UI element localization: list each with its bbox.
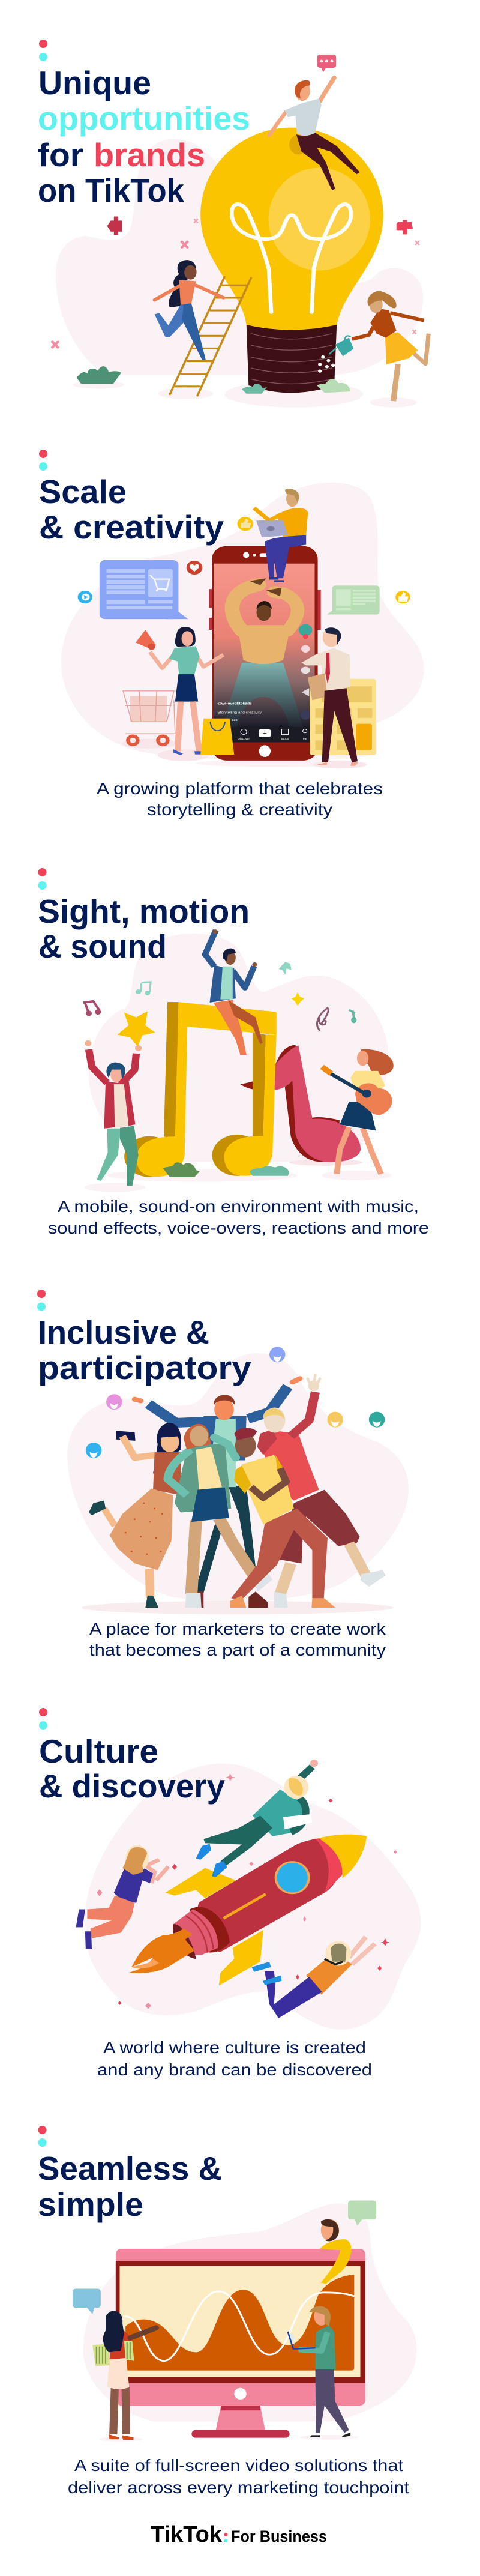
icon: phone: Me (303, 737, 307, 741)
figure: man flying above (196, 1760, 318, 1877)
icon: chat bubbles (73, 2200, 376, 2314)
title: for (38, 136, 83, 173)
section marker dots (39, 1708, 47, 1730)
figure: man sitting on bulb (269, 77, 359, 190)
illustration: lightbulb with people (52, 55, 428, 408)
figure: woman on ladder (155, 260, 223, 360)
heading: & discovery (39, 1767, 225, 1805)
icon: phone: + (263, 730, 267, 737)
caption: deliver across every marketing touchpoint (68, 2478, 409, 2497)
title: Unique (38, 64, 151, 101)
icon: phone: Storytelling and creativity (217, 711, 262, 715)
icon: bushes (77, 366, 350, 394)
panel: sight, motion and sound (38, 868, 429, 1237)
heading: participatory (38, 1349, 251, 1386)
caption: A place for marketers to create work (89, 1620, 386, 1638)
caption (68, 2456, 409, 2497)
panel: intro (38, 40, 428, 408)
heading (39, 1733, 225, 1805)
heading: & creativity (39, 508, 224, 546)
caption (89, 1620, 386, 1659)
heading: Culture (39, 1733, 158, 1770)
icon: calculator (310, 679, 376, 755)
heading: Seamless & (38, 2150, 222, 2187)
caption: A growing platform that celebrates (97, 779, 383, 798)
figure: man on phone (302, 627, 358, 766)
figure: woman with polka skirt and phone (89, 1423, 181, 1608)
panel: culture and discovery (39, 1708, 421, 2079)
caption (97, 2038, 372, 2079)
icon: puzzle pieces and crosses (52, 216, 419, 348)
icon: monitor (116, 2249, 365, 2438)
illustration: monitor with people (73, 2200, 417, 2442)
logo: TikTok For Business (151, 2522, 327, 2547)
caption: and any brand can be discovered (97, 2060, 372, 2079)
caption (97, 779, 383, 819)
figure: woman in green jacket (168, 1424, 272, 1608)
figure: man with laptop (254, 489, 308, 582)
icon: reaction bubbles (78, 517, 410, 603)
figure: person sitting on note (205, 929, 263, 1055)
heading (39, 473, 224, 546)
icon: phone: Inbox (281, 737, 289, 741)
figure: man in yellow tee and cap (230, 1428, 335, 1608)
section marker dots (39, 450, 47, 471)
icon: pink note (241, 1045, 361, 1162)
caption: A suite of full-screen video solutions that (74, 2456, 403, 2475)
caption: that becomes a part of a community (89, 1641, 386, 1659)
figure: bearded man leaning over (320, 2219, 352, 2284)
icon: lightbulb (200, 128, 383, 393)
panel: inclusive and participatory (37, 1290, 409, 1659)
heading (38, 893, 250, 965)
section marker dots (39, 40, 47, 61)
figure: woman at left (92, 2311, 156, 2440)
heading: Sight, motion (38, 893, 250, 930)
section marker dots (37, 1290, 46, 1311)
caption: sound effects, voice-overs, reactions and more (48, 1219, 429, 1237)
icon: shopping cart (123, 691, 175, 745)
figure: woman watering (352, 291, 428, 401)
icon: yellow double note (124, 1002, 277, 1177)
panel: scale and creativity (39, 450, 424, 819)
heading (38, 2150, 222, 2223)
icon: phone: Discover (238, 737, 250, 741)
logo: TikTok For Business: TikTok (151, 2522, 223, 2547)
figure: man in red hoodie (257, 1375, 386, 1608)
figure: woman with guitar (322, 1049, 394, 1174)
icon: sparkles (97, 1773, 397, 2009)
icon: yellow shopping bag (200, 719, 234, 755)
panel: seamless and simple (38, 2126, 417, 2547)
figure: man at back in blue (134, 1378, 300, 1608)
logo: TikTok For Business: For Business (231, 2527, 327, 2545)
icon: green shopping panel (327, 585, 380, 615)
section marker dots (38, 2126, 47, 2147)
icon: phone: @welovetiktokads (217, 702, 252, 705)
title (38, 64, 250, 209)
figure: man with laptop (288, 2306, 350, 2437)
section marker dots (38, 868, 47, 890)
icon: rocket flame (128, 1929, 194, 1973)
icon: rating bubble (317, 55, 336, 72)
caption (48, 1197, 429, 1237)
chart: orange area and white wave (124, 2275, 354, 2371)
figure: woman flying below (251, 1937, 375, 2018)
title: on TikTok (38, 172, 184, 209)
heading: & sound (38, 928, 167, 965)
icon: rocket (166, 1835, 367, 1986)
heading: Inclusive & (38, 1314, 209, 1351)
illustration: phone with marketers (61, 483, 424, 768)
illustration: rocket with flying people (76, 1760, 421, 2030)
icon: bushes (163, 1162, 289, 1177)
icon: floating notes and stars (83, 962, 356, 1031)
caption: A mobile, sound-on environment with music, (58, 1197, 419, 1216)
illustration: musical notes with people (83, 929, 394, 1192)
icon: ladder (170, 277, 251, 396)
icon: smiley bubbles (86, 1347, 385, 1458)
title: brands (94, 136, 205, 173)
figure: person holding star (85, 1011, 155, 1186)
heading: simple (38, 2186, 143, 2223)
icon: phone (209, 546, 321, 761)
icon: watering can and stars (318, 336, 353, 373)
caption: storytelling & creativity (147, 800, 332, 819)
icon: blue shopping panel (100, 560, 188, 619)
heading: Scale (39, 473, 127, 510)
figure: woman with megaphone (136, 627, 223, 755)
icon: phone: 123 (232, 719, 238, 722)
caption: A world where culture is created (103, 2038, 366, 2057)
title: opportunities (38, 100, 250, 137)
illustration: group selfie (67, 1347, 409, 1614)
figure: woman flying left (76, 1845, 169, 1949)
heading (38, 1314, 251, 1386)
